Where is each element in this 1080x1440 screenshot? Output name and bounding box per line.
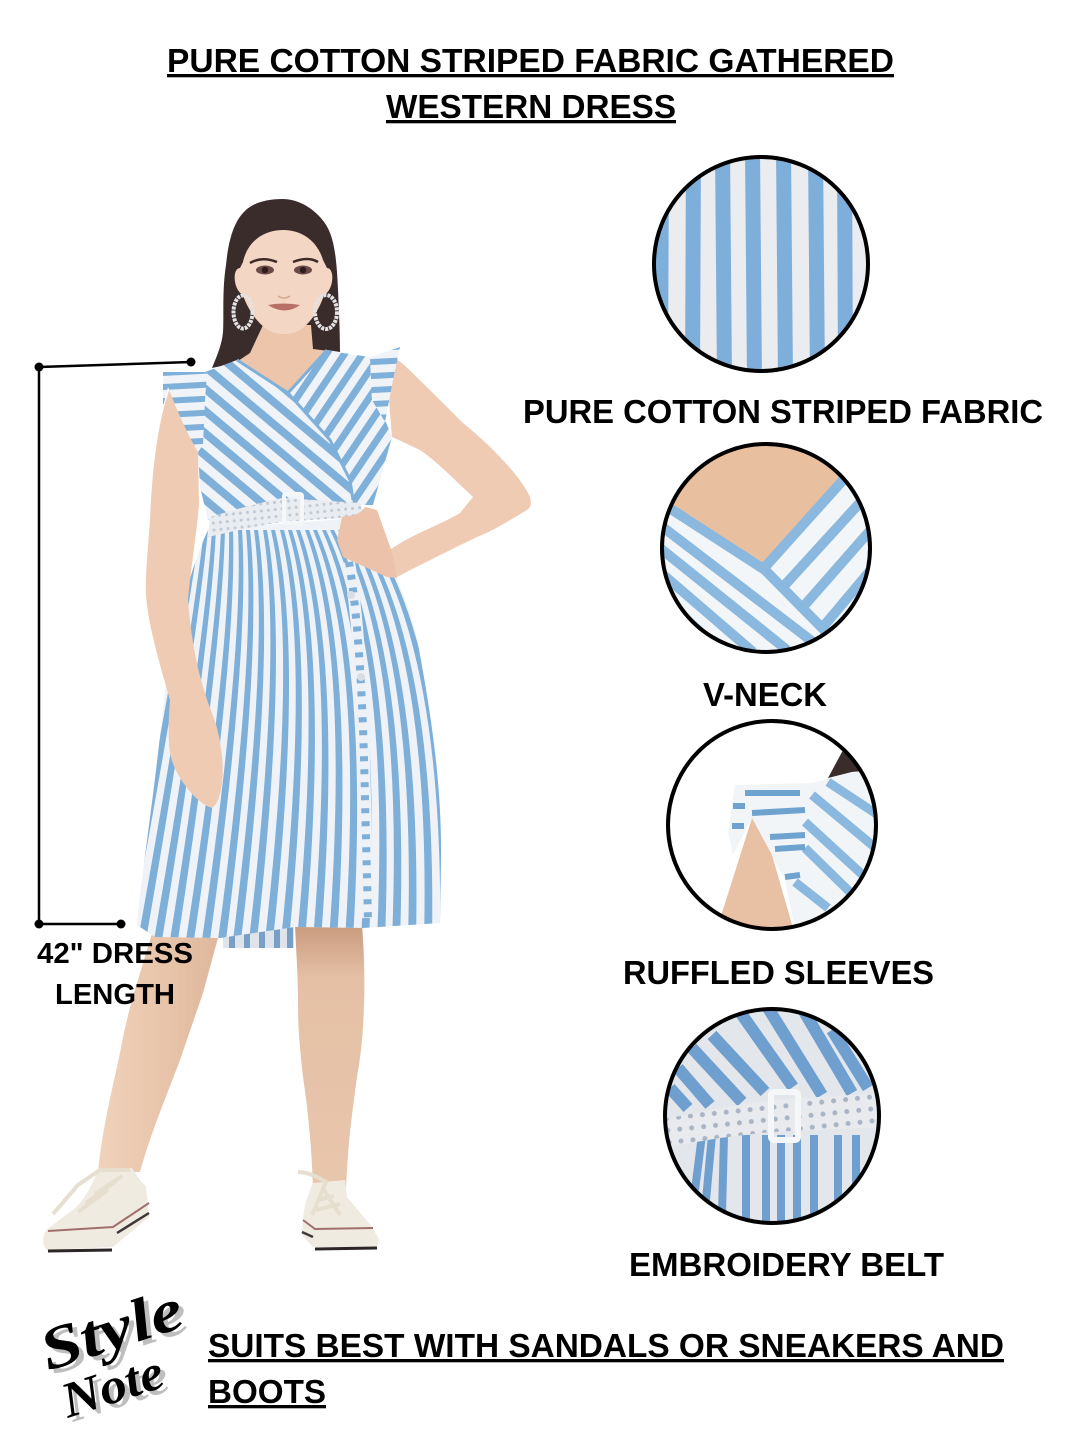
detail: ruffled sleeves — [623, 720, 934, 991]
detail: striped fabric — [523, 150, 1043, 430]
hair — [212, 199, 340, 368]
right sneaker — [298, 1172, 379, 1249]
left bodice panel — [198, 360, 353, 520]
detail: ruffled sleeves: RUFFLED SLEEVES — [623, 954, 934, 991]
hand on waist — [337, 507, 397, 578]
style note logo: Style — [37, 1279, 196, 1387]
detail: v-neck — [655, 440, 880, 713]
dress length measurement — [34, 358, 196, 1011]
neck and chest — [238, 325, 329, 394]
left ruffled sleeve — [163, 372, 207, 452]
button placket — [347, 562, 368, 918]
hoop earrings — [234, 295, 337, 329]
detail: embroidery belt — [629, 1005, 944, 1283]
right arm — [385, 352, 531, 577]
style note text: BOOTS — [208, 1373, 326, 1410]
left leg — [98, 930, 218, 1172]
dress back hem panel — [223, 925, 294, 948]
style note logo: Note — [53, 1343, 170, 1429]
left wrap panel — [664, 514, 805, 650]
detail: striped fabric: PURE COTTON STRIPED FABRIC — [523, 393, 1043, 430]
title: PURE COTTON STRIPED FABRIC GATHERED — [167, 42, 894, 79]
face — [235, 230, 332, 334]
dress length measurement: LENGTH — [55, 979, 175, 1011]
title — [167, 42, 894, 125]
title: WESTERN DRESS — [386, 88, 676, 125]
facial features — [250, 259, 318, 310]
right bodice panel — [288, 350, 392, 505]
right wrap panel — [770, 484, 868, 628]
style note text — [208, 1327, 1004, 1410]
detail: v-neck: V-NECK — [703, 676, 827, 713]
right leg — [295, 925, 364, 1190]
style note logo — [32, 1275, 196, 1433]
neckline trim — [237, 350, 353, 500]
style note logo: Note — [58, 1347, 175, 1433]
dress length measurement: 42" DRESS — [37, 938, 193, 970]
right ruffled sleeve — [370, 347, 400, 422]
left sneaker — [43, 1168, 149, 1251]
model wearing striped dress — [43, 199, 531, 1251]
style note logo: Style — [32, 1275, 191, 1383]
detail: embroidery belt: EMBROIDERY BELT — [629, 1246, 944, 1283]
style note text: SUITS BEST WITH SANDALS OR SNEAKERS AND — [208, 1327, 1004, 1364]
dress skirt — [137, 519, 442, 938]
left arm and hand — [146, 388, 223, 808]
belt and buckle — [208, 494, 365, 537]
